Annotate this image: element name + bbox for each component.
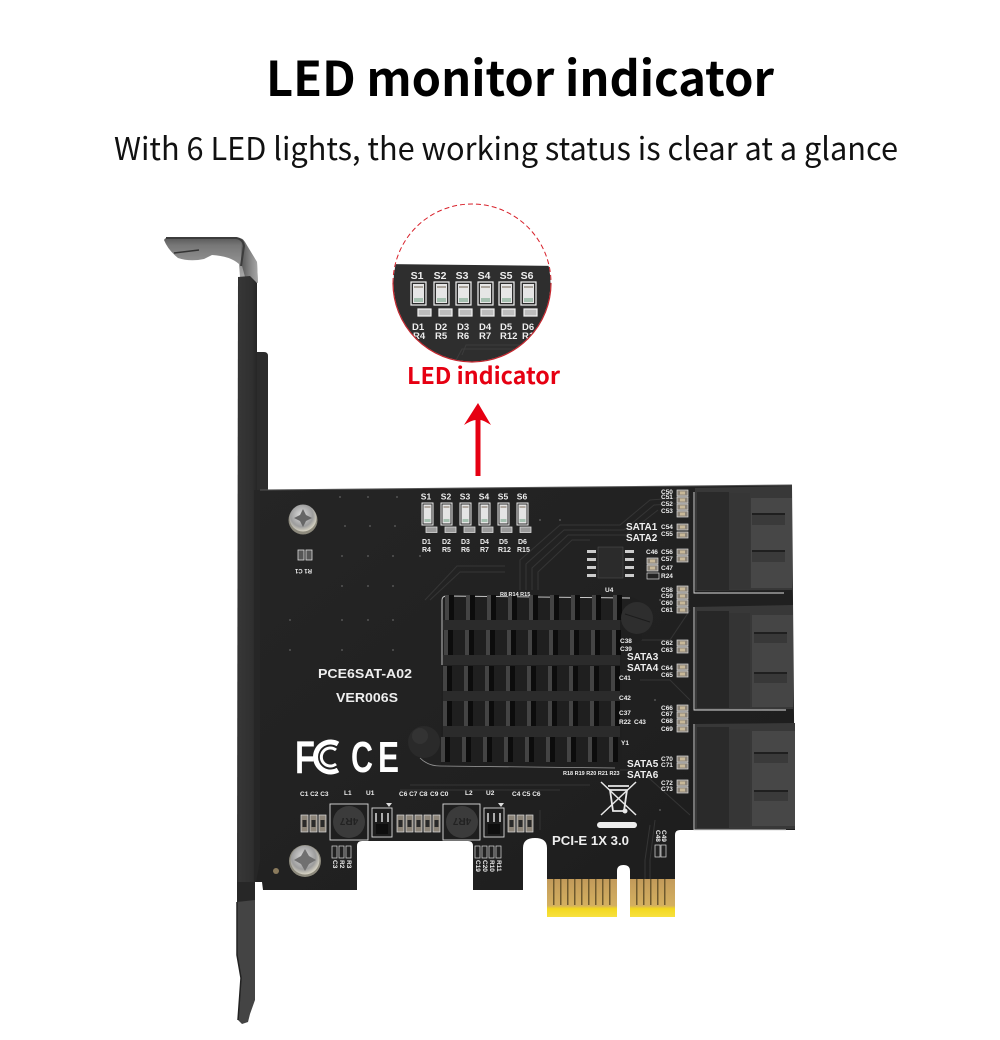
capacitor labels and pads: C62 bbox=[661, 640, 673, 647]
power section: inductors, regulators and passives: R2 bbox=[338, 860, 345, 869]
board LEDs S1-S6: S1 bbox=[421, 492, 431, 502]
capacitor labels and pads: C67 bbox=[661, 711, 673, 718]
capacitor labels and pads: C69 bbox=[661, 726, 673, 733]
power section: inductors, regulators and passives: 4R7 bbox=[339, 815, 358, 826]
board LEDs S1-S6: D4 bbox=[480, 539, 489, 546]
model number text: PCE6SAT-A02 bbox=[318, 667, 412, 681]
infographic canvas bbox=[114, 57, 897, 1024]
board LEDs S1-S6: R6 bbox=[461, 547, 470, 554]
SATA silkscreen labels: SATA1 bbox=[626, 522, 658, 533]
heatsink push pins bbox=[408, 602, 653, 758]
capacitor labels and pads: C64 bbox=[661, 665, 673, 672]
FC logo bbox=[295, 731, 338, 783]
power section: inductors, regulators and passives: C20 bbox=[481, 860, 488, 872]
capacitor labels and pads: C68 bbox=[661, 718, 673, 725]
capacitor labels and pads: C54 bbox=[661, 524, 673, 531]
capacitor labels and pads: C46 bbox=[646, 549, 658, 556]
SATA connector 3 bbox=[694, 723, 795, 830]
CE logo: C bbox=[351, 733, 373, 782]
heatsink silkscreen labels: R18 R19 R20 R21 R23 bbox=[563, 771, 620, 777]
capacitor labels and pads: C56 bbox=[661, 549, 673, 556]
board LEDs S1-S6 bbox=[421, 492, 531, 554]
capacitor labels and pads: C53 bbox=[661, 508, 673, 515]
magnified D and R labels: R7 bbox=[479, 331, 491, 342]
circuit traces bbox=[400, 497, 690, 880]
power section: inductors, regulators and passives: C1 C2 C3 bbox=[300, 791, 329, 798]
magnified S labels: S2 bbox=[434, 270, 447, 282]
capacitor labels and pads: C72 bbox=[661, 780, 673, 787]
SATA silkscreen labels: SATA3 bbox=[627, 652, 659, 663]
magnified D and R labels: R4 bbox=[413, 331, 426, 342]
SATA silkscreen labels: SATA2 bbox=[626, 533, 658, 544]
magnified D and R labels: D3 bbox=[457, 322, 469, 333]
capacitor labels and pads: C58 bbox=[661, 587, 673, 594]
capacitor labels and pads: C65 bbox=[661, 672, 673, 679]
magnified D and R labels: D2 bbox=[435, 322, 447, 333]
capacitor labels and pads: C71 bbox=[661, 762, 673, 769]
capacitor labels and pads: C55 bbox=[661, 531, 673, 538]
heatsink bbox=[420, 595, 642, 768]
heatsink silkscreen labels: Y1 bbox=[621, 740, 629, 747]
board LEDs S1-S6: S4 bbox=[479, 492, 489, 502]
recycling bin mark bbox=[597, 782, 637, 828]
capacitor labels and pads: C51 bbox=[661, 494, 673, 501]
magnified LEDs bbox=[411, 282, 536, 305]
magnified D and R labels: R15 bbox=[522, 331, 540, 342]
capacitor labels and pads bbox=[646, 489, 688, 793]
capacitor labels and pads: C60 bbox=[661, 600, 673, 607]
heatsink silkscreen labels: R22 bbox=[619, 719, 631, 726]
power section: inductors, regulators and passives: L1 bbox=[344, 790, 352, 797]
magnified D and R labels: D5 bbox=[500, 322, 513, 333]
R1 C1 pads bbox=[294, 550, 312, 573]
power section: inductors, regulators and passives: C4 C5 C6 bbox=[512, 791, 541, 798]
capacitor labels and pads: C63 bbox=[661, 647, 673, 654]
PCB board bbox=[256, 485, 795, 917]
SATA silkscreen labels: SATA4 bbox=[627, 663, 659, 674]
subtitle: With 6 LED lights, the working status is clear at a glance bbox=[114, 124, 898, 170]
board LEDs S1-S6: R15 bbox=[517, 547, 530, 554]
board LEDs S1-S6: R12 bbox=[498, 547, 511, 554]
SATA connector 2 bbox=[694, 605, 793, 710]
capacitor labels and pads: C50 bbox=[661, 489, 673, 496]
board LEDs S1-S6: D5 bbox=[499, 539, 508, 546]
magnified resistor pads bbox=[418, 309, 537, 316]
magnified S labels: S4 bbox=[478, 270, 491, 282]
power section: inductors, regulators and passives: C6 C7 C8 bbox=[399, 791, 428, 798]
board LEDs S1-S6: D3 bbox=[461, 539, 470, 546]
power section: inductors, regulators and passives: C48 bbox=[654, 830, 661, 842]
heatsink silkscreen labels: C38 bbox=[620, 638, 632, 645]
board LEDs S1-S6: S6 bbox=[517, 492, 527, 502]
board LEDs S1-S6: R5 bbox=[442, 547, 451, 554]
board LEDs S1-S6: S2 bbox=[441, 492, 451, 502]
magnified D and R labels: D1 bbox=[412, 322, 425, 333]
heatsink silkscreen labels: C43 bbox=[634, 719, 646, 726]
FC logo: F bbox=[295, 731, 315, 783]
magnified LED indicator lens bbox=[392, 204, 552, 363]
capacitor labels and pads: C52 bbox=[661, 501, 673, 508]
SATA silkscreen labels bbox=[626, 522, 659, 781]
heatsink silkscreen labels bbox=[500, 592, 646, 777]
capacitor labels and pads: C57 bbox=[661, 556, 673, 563]
vias bbox=[289, 496, 661, 811]
magnified S labels bbox=[411, 272, 534, 279]
magnified S labels: S1 bbox=[411, 270, 424, 282]
board LEDs S1-S6: S5 bbox=[498, 492, 508, 502]
top screw bbox=[288, 504, 318, 534]
LED indicator label: LED indicator bbox=[407, 357, 561, 391]
SATA silkscreen labels: SATA5 bbox=[627, 759, 659, 770]
board LEDs S1-S6: D2 bbox=[442, 539, 451, 546]
U4 chip: U4 bbox=[605, 587, 614, 594]
board LEDs S1-S6: R4 bbox=[422, 547, 431, 554]
board LEDs S1-S6: D1 bbox=[422, 539, 431, 546]
power section: inductors, regulators and passives: C3 bbox=[331, 860, 338, 869]
PCI-E label: PCI-E 1X 3.0 bbox=[552, 833, 629, 848]
board LEDs S1-S6: D6 bbox=[518, 539, 527, 546]
heatsink silkscreen labels: C37 bbox=[619, 710, 631, 717]
power section: inductors, regulators and passives: 4R7 bbox=[452, 815, 471, 826]
capacitor labels and pads: C66 bbox=[661, 705, 673, 712]
power section: inductors, regulators and passives: R10 bbox=[488, 860, 495, 872]
capacitor labels and pads: C47 bbox=[661, 565, 673, 572]
power section: inductors, regulators and passives: U2 bbox=[486, 790, 495, 797]
magnified D and R labels: D4 bbox=[479, 322, 492, 333]
magnified D and R labels: D6 bbox=[522, 322, 534, 333]
capacitor labels and pads: C61 bbox=[661, 607, 673, 614]
model number text: VER006S bbox=[336, 691, 398, 705]
capacitor labels and pads: R24 bbox=[661, 573, 673, 580]
power section: inductors, regulators and passives: U1 bbox=[366, 790, 375, 797]
magnified D and R labels: R6 bbox=[457, 331, 469, 342]
power section: inductors, regulators and passives bbox=[300, 790, 667, 872]
metal bracket bbox=[164, 237, 268, 1024]
capacitor labels and pads: C73 bbox=[661, 786, 673, 793]
arrow pointing up bbox=[464, 403, 491, 476]
magnified D and R labels bbox=[412, 324, 534, 339]
power section: inductors, regulators and passives: R3 bbox=[345, 860, 352, 869]
power section: inductors, regulators and passives: C9 C0 bbox=[430, 791, 449, 798]
heatsink silkscreen labels: C42 bbox=[619, 695, 631, 702]
board LEDs S1-S6: S3 bbox=[460, 492, 470, 502]
power section: inductors, regulators and passives: C19 bbox=[474, 860, 481, 872]
U4 chip bbox=[587, 547, 634, 594]
power section: inductors, regulators and passives: C49 bbox=[660, 830, 667, 842]
power section: inductors, regulators and passives: R11 bbox=[495, 860, 502, 872]
heatsink silkscreen labels: C41 bbox=[619, 675, 631, 682]
capacitor labels and pads: C70 bbox=[661, 756, 673, 763]
model number text bbox=[318, 667, 412, 705]
SATA silkscreen labels: SATA6 bbox=[627, 770, 659, 781]
heatsink silkscreen labels: C39 bbox=[620, 646, 632, 653]
bottom screw bbox=[289, 845, 321, 877]
heatsink silkscreen labels: R8 R14 R15 bbox=[500, 592, 530, 598]
capacitor labels and pads: C59 bbox=[661, 593, 673, 600]
gold fingers bbox=[547, 879, 675, 917]
title: LED monitor indicator bbox=[266, 40, 774, 110]
CE logo: E bbox=[378, 733, 399, 782]
SATA connector 1 bbox=[694, 486, 792, 593]
magnified D and R labels: R12 bbox=[500, 331, 517, 342]
magnified S labels: S3 bbox=[456, 270, 469, 282]
R1 C1 pads: R1 C1 bbox=[294, 567, 312, 573]
magnified S labels: S6 bbox=[521, 270, 534, 282]
power section: inductors, regulators and passives: L2 bbox=[465, 790, 473, 797]
board LEDs S1-S6: R7 bbox=[480, 547, 489, 554]
CE logo bbox=[351, 733, 399, 782]
magnified S labels: S5 bbox=[500, 270, 513, 282]
magnified D and R labels: R5 bbox=[435, 331, 448, 342]
